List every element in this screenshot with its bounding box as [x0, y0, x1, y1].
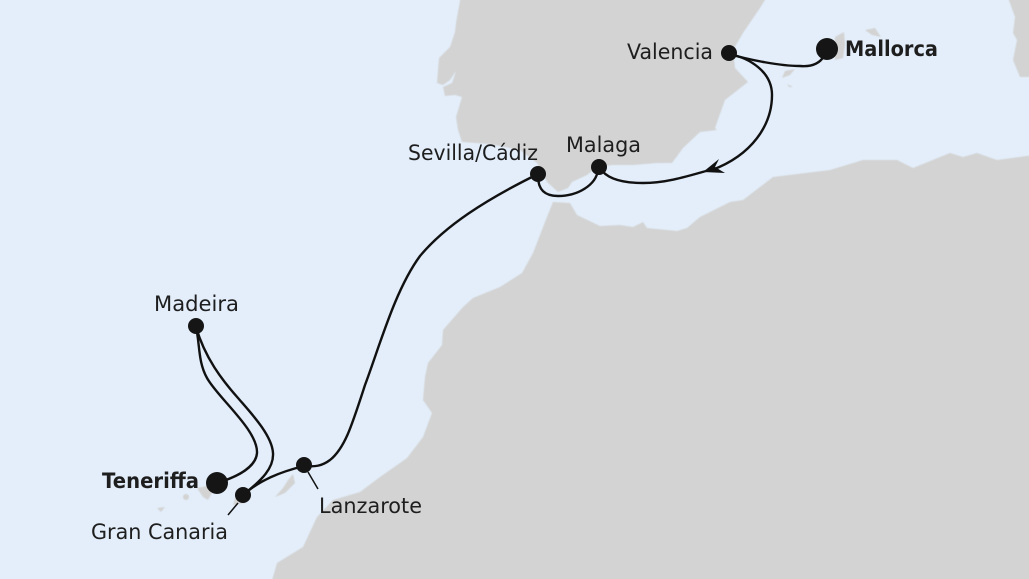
- marker: Malaga: [591, 159, 607, 175]
- label: Madeira: Madeira: [154, 292, 239, 317]
- label: Malaga: Malaga: [566, 133, 641, 158]
- marker: Madeira: [188, 318, 204, 334]
- cruise route lines: [196, 54, 824, 495]
- route: Gran Canaria to Madeira: [196, 327, 273, 495]
- marker: Mallorca: [816, 38, 838, 60]
- route: Malaga to arrow: [600, 168, 706, 183]
- land: Formentera: [787, 84, 793, 87]
- land: Corsica and Sardinia: [1007, 0, 1029, 77]
- marker: Gran Canaria: [235, 487, 251, 503]
- land: Gran Canaria: [233, 492, 250, 505]
- marker: Sevilla/Cádiz: [530, 166, 546, 182]
- label: Gran Canaria: Gran Canaria: [91, 520, 228, 545]
- label: Teneriffa: Teneriffa: [102, 469, 199, 494]
- leader line: Lanzarote: [308, 472, 318, 489]
- land: Mallorca: [835, 32, 845, 60]
- route: Malaga to Sevilla: [538, 170, 598, 196]
- land: La Gomera: [183, 494, 189, 500]
- land: El Hierro: [157, 507, 165, 512]
- route: Madeira to Teneriffa: [196, 327, 257, 483]
- route: Valencia to arrow: [712, 54, 772, 170]
- route: Lanzarote to Gran Canaria: [243, 466, 304, 495]
- land: Ibiza: [782, 69, 795, 78]
- land: Iberian Peninsula: [437, 0, 768, 192]
- label: Mallorca: Mallorca: [845, 37, 938, 62]
- marker: Lanzarote: [296, 457, 312, 473]
- label: Lanzarote: Lanzarote: [319, 494, 422, 519]
- arrowhead: [703, 159, 725, 173]
- land: Menorca: [865, 28, 881, 37]
- marker: Teneriffa: [206, 472, 228, 494]
- land: Fuerteventura: [275, 474, 295, 497]
- label: Valencia: Valencia: [627, 40, 713, 65]
- land: Tenerife: [197, 486, 212, 500]
- label: Sevilla/Cádiz: Sevilla/Cádiz: [408, 141, 538, 166]
- marker: Valencia: [721, 45, 737, 61]
- route: Mallorca to Valencia: [729, 54, 824, 66]
- leader line: Gran Canaria: [228, 503, 238, 515]
- port markers: [188, 38, 838, 503]
- route: Sevilla to Lanzarote: [305, 174, 538, 466]
- land: North Africa: [271, 153, 1029, 579]
- port labels: [91, 37, 938, 545]
